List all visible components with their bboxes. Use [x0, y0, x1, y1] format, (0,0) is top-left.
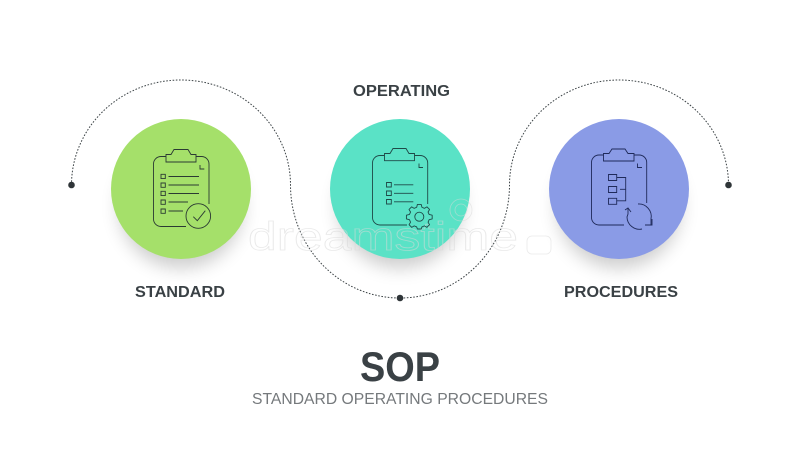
- icon: clipboard with gear: [372, 148, 432, 229]
- watermark: dreamstime: [248, 215, 518, 259]
- watermark: [248, 199, 551, 259]
- subtitle: STANDARD OPERATING PROCEDURES: [252, 391, 548, 408]
- step 1: standard circle: [111, 119, 251, 268]
- step 2: operating circle: [330, 119, 470, 268]
- icon: clipboard with refresh arrows: [592, 149, 652, 229]
- label: procedures: PROCEDURES: [564, 284, 678, 301]
- label: standard: STANDARD: [135, 284, 225, 301]
- step 3: procedures circle: [549, 119, 689, 268]
- icon: clipboard with check mark: [154, 150, 211, 228]
- icon detail: gear: [406, 204, 432, 229]
- dashed connector path: [68, 80, 732, 301]
- label: operating: OPERATING: [353, 83, 450, 100]
- title: SOP: [360, 343, 440, 390]
